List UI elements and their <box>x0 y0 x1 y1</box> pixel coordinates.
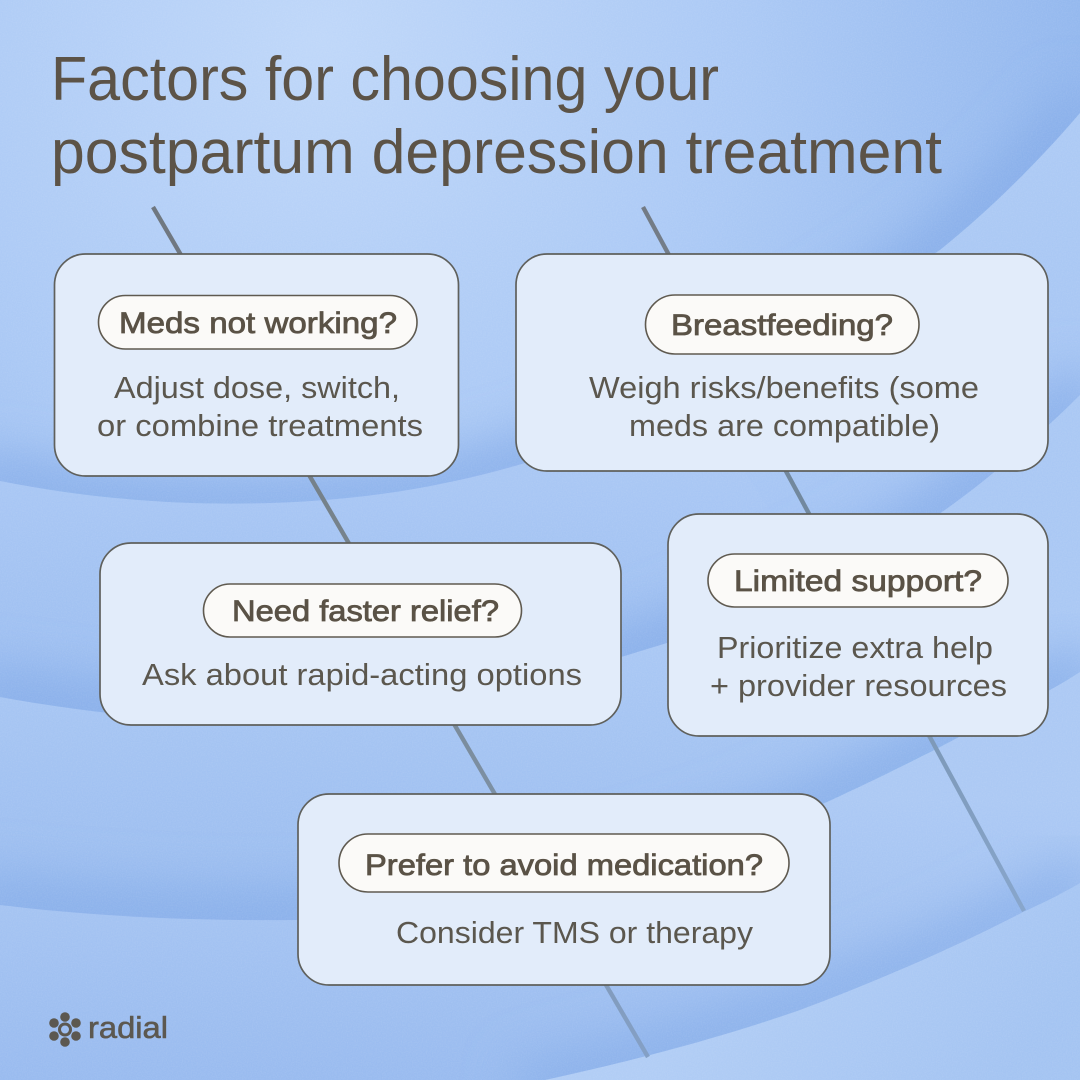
panel: need faster relief <box>100 543 621 725</box>
text: breastfeeding advice: meds are compatible) <box>629 409 940 443</box>
panel: prefer to avoid medication <box>298 794 830 985</box>
panel: limited support <box>668 514 1048 736</box>
connector line: right diagonal <box>643 207 1024 911</box>
text: meds not working advice: Adjust dose, switch, <box>114 371 400 405</box>
logo: radial <box>49 1010 168 1047</box>
pill heading: prefer to avoid medication: Prefer to avoid medication? <box>365 849 763 882</box>
panel: breastfeeding <box>516 254 1048 471</box>
pill heading: breastfeeding: Breastfeeding? <box>671 309 893 342</box>
pill heading: need faster relief: Need faster relief? <box>232 595 499 628</box>
text: breastfeeding advice: Weigh risks/benefits (some <box>589 371 979 405</box>
pill heading: prefer to avoid medication <box>339 834 789 892</box>
pill heading: limited support: Limited support? <box>734 565 982 598</box>
icon: radial flower <box>49 1012 81 1047</box>
pill heading: breastfeeding <box>646 295 919 354</box>
pill heading: limited support <box>708 554 1008 607</box>
connector line: left diagonal <box>153 207 648 1057</box>
panel: meds not working <box>54 254 458 476</box>
text: limited support advice: + provider resources <box>710 669 1007 703</box>
logo: radial: radial <box>88 1010 168 1045</box>
text: limited support advice <box>710 631 1007 703</box>
text: prefer to avoid medication advice: Consider TMS or therapy <box>396 916 754 950</box>
pill heading: meds not working <box>98 296 417 349</box>
title: postpartum depression treatment <box>51 118 942 187</box>
text: breastfeeding advice <box>589 371 979 443</box>
text: limited support advice: Prioritize extra help <box>717 631 993 665</box>
text: meds not working advice: or combine treatments <box>97 409 423 443</box>
pill heading: need faster relief <box>204 584 522 637</box>
text: need faster relief advice: Ask about rapid-acting options <box>142 658 582 692</box>
pill heading: meds not working: Meds not working? <box>119 307 397 340</box>
text: meds not working advice <box>97 371 423 443</box>
title <box>51 45 942 187</box>
title: Factors for choosing your <box>51 45 719 114</box>
